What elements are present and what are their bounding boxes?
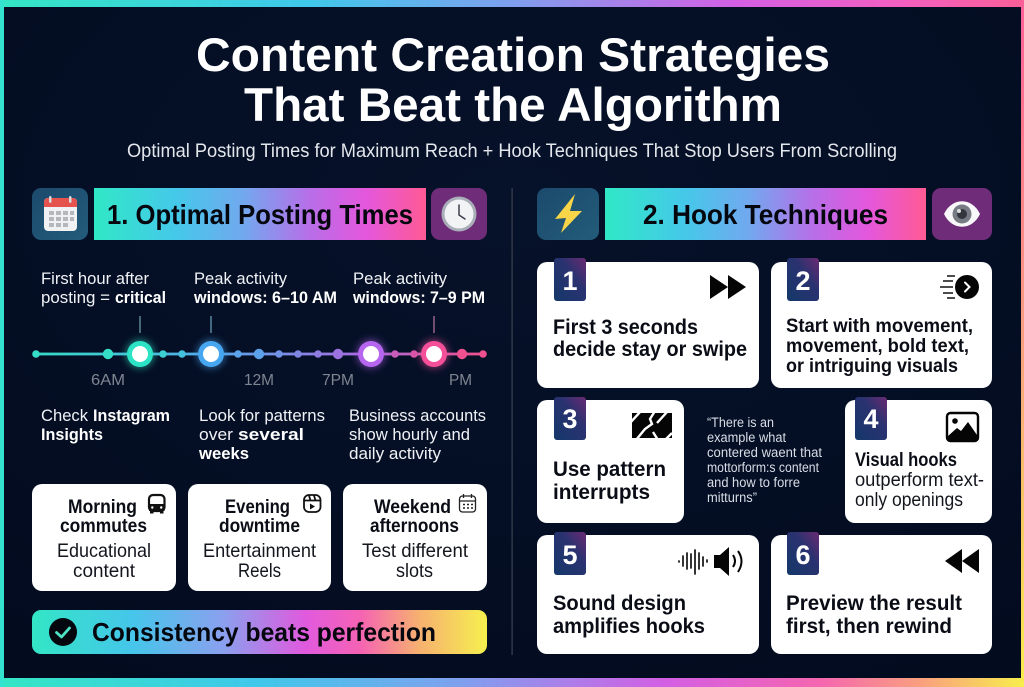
- section header: optimal posting times: [32, 188, 487, 240]
- quote text: [707, 415, 822, 505]
- timeline callouts top: critical: [115, 288, 166, 307]
- card 5: sound design: [537, 532, 759, 654]
- timeline chart: 12M: [244, 372, 274, 389]
- timeline chart: [32, 316, 487, 389]
- quote text: example what: [707, 430, 786, 445]
- timeline callouts top: windows: 6–10 AM: [193, 288, 337, 307]
- timeline chart: 6AM: [91, 372, 125, 389]
- card: weekend afternoons: afternoons: [370, 516, 459, 537]
- card: morning commutes: Educational: [57, 540, 151, 562]
- banner: consistency beats perfection: Consistency beats perfection: [92, 617, 436, 647]
- card 6: preview the result: [771, 532, 992, 654]
- heading bar: [605, 188, 926, 240]
- timeline callouts top: Peak activity: [194, 269, 287, 288]
- icon: broken pattern: [632, 413, 672, 438]
- timeline notes: Look for patterns: [199, 406, 325, 425]
- badge 2: 2: [795, 266, 811, 296]
- subtitle: Optimal Posting Times for Maximum Reach + Hook Techniques That Stop Users From Scrolling: [127, 140, 897, 162]
- icon: check mark: [49, 618, 77, 646]
- badge 5: [554, 532, 586, 575]
- card: evening downtime: [188, 484, 331, 591]
- card 6: preview the result: Preview the result: [786, 591, 962, 615]
- icon: eye: [932, 188, 992, 240]
- icon: calendar: [32, 188, 88, 240]
- badge 6: [787, 532, 819, 575]
- timeline notes: show hourly and: [349, 425, 470, 444]
- quote text: and how to forre: [707, 475, 800, 490]
- card 3: pattern interrupts: interrupts: [553, 480, 650, 504]
- section header: hook techniques: [537, 188, 992, 240]
- title: Content Creation Strategies: [196, 28, 830, 81]
- timeline notes: Business accounts: [349, 406, 486, 425]
- heading bar: 2. Hook Techniques: [643, 199, 888, 230]
- card 1: first 3 seconds: decide stay or swipe: [553, 337, 747, 361]
- card 4: visual hooks: Visual hooks: [855, 450, 957, 471]
- card 3: pattern interrupts: Use pattern: [553, 457, 666, 481]
- badge 4: 4: [863, 404, 879, 434]
- card: evening downtime: downtime: [219, 516, 300, 537]
- card 2: start with movement: movement, bold text,: [786, 336, 969, 357]
- icon: small calendar: [460, 494, 476, 512]
- timeline notes: [41, 406, 486, 463]
- quote text: contered waent that: [707, 445, 822, 460]
- card 2: start with movement: [771, 258, 992, 388]
- card: morning commutes: Morning: [68, 497, 137, 518]
- title: That Beat the Algorithm: [244, 78, 782, 131]
- heading bar: 1. Optimal Posting Times: [107, 199, 413, 230]
- card 3: pattern interrupts: [537, 397, 684, 523]
- badge 1: [554, 258, 586, 301]
- timeline notes: over: [199, 425, 233, 444]
- quote text: mottorform:s content: [707, 460, 819, 475]
- card: morning commutes: content: [73, 560, 136, 582]
- timeline callouts top: First hour after: [41, 269, 149, 288]
- timeline notes: Instagram: [93, 406, 170, 425]
- timeline callouts top: posting =: [41, 288, 110, 307]
- icon: lightning bolt: [537, 188, 599, 240]
- timeline notes: daily activity: [349, 444, 442, 463]
- card 4: visual hooks: [845, 397, 992, 523]
- timeline notes: weeks: [198, 444, 249, 463]
- card: weekend afternoons: Test different: [362, 540, 469, 562]
- card 6: preview the result: first, then rewind: [786, 614, 952, 638]
- card 2: start with movement: Start with movement,: [786, 316, 973, 337]
- icon: clock: [431, 188, 487, 240]
- timeline notes: Check: [41, 406, 88, 425]
- card: evening downtime: Reels: [238, 560, 281, 582]
- panel: hook techniques: [537, 188, 992, 654]
- timeline chart: 7PM: [322, 372, 354, 389]
- icon: fast forward: [710, 275, 746, 299]
- badge 1: 1: [562, 266, 578, 296]
- badge 4: [855, 397, 887, 440]
- icon: sound wave and speaker: [679, 547, 742, 576]
- heading bar: [94, 188, 426, 240]
- timeline callouts top: Peak activity: [353, 269, 447, 288]
- timeline notes: several: [238, 425, 304, 444]
- divider: [512, 188, 513, 655]
- card: morning commutes: commutes: [60, 516, 147, 537]
- card 1: first 3 seconds: First 3 seconds: [553, 315, 698, 339]
- timeline notes: Insights: [41, 425, 103, 444]
- card 2: start with movement: or intriguing visuals: [786, 356, 958, 377]
- banner: consistency beats perfection: [32, 610, 487, 654]
- badge 3: [554, 397, 586, 440]
- card 4: visual hooks: outperform text-: [855, 469, 984, 491]
- card: weekend afternoons: slots: [396, 560, 433, 582]
- icon: speed arrow: [940, 275, 979, 299]
- card: evening downtime: Evening: [225, 497, 290, 518]
- badge 5: 5: [562, 540, 578, 570]
- timeline callouts top: windows: 7–9 PM: [352, 288, 485, 307]
- panel: optimal posting times: [32, 188, 487, 654]
- quote text: mitturns”: [707, 490, 757, 505]
- icon: image: [947, 413, 978, 441]
- badge 6: 6: [795, 540, 811, 570]
- badge 3: 3: [562, 404, 578, 434]
- card: weekend afternoons: Weekend: [374, 497, 451, 518]
- card: morning commutes: [32, 484, 176, 591]
- card 1: first 3 seconds: [537, 258, 759, 388]
- badge 2: [787, 258, 819, 301]
- title: [196, 28, 830, 131]
- timeline callouts top: [41, 269, 485, 307]
- icon: reels: [304, 495, 320, 512]
- card 4: visual hooks: only openings: [855, 489, 963, 511]
- card 5: sound design: Sound design: [553, 591, 686, 615]
- timeline chart: PM: [449, 372, 472, 389]
- card: evening downtime: Entertainment: [203, 540, 317, 562]
- icon: rewind: [945, 549, 979, 573]
- quote text: “There is an: [707, 415, 774, 430]
- icon: bus: [149, 495, 164, 514]
- card: weekend afternoons: [343, 484, 487, 591]
- card 5: sound design: amplifies hooks: [553, 614, 705, 638]
